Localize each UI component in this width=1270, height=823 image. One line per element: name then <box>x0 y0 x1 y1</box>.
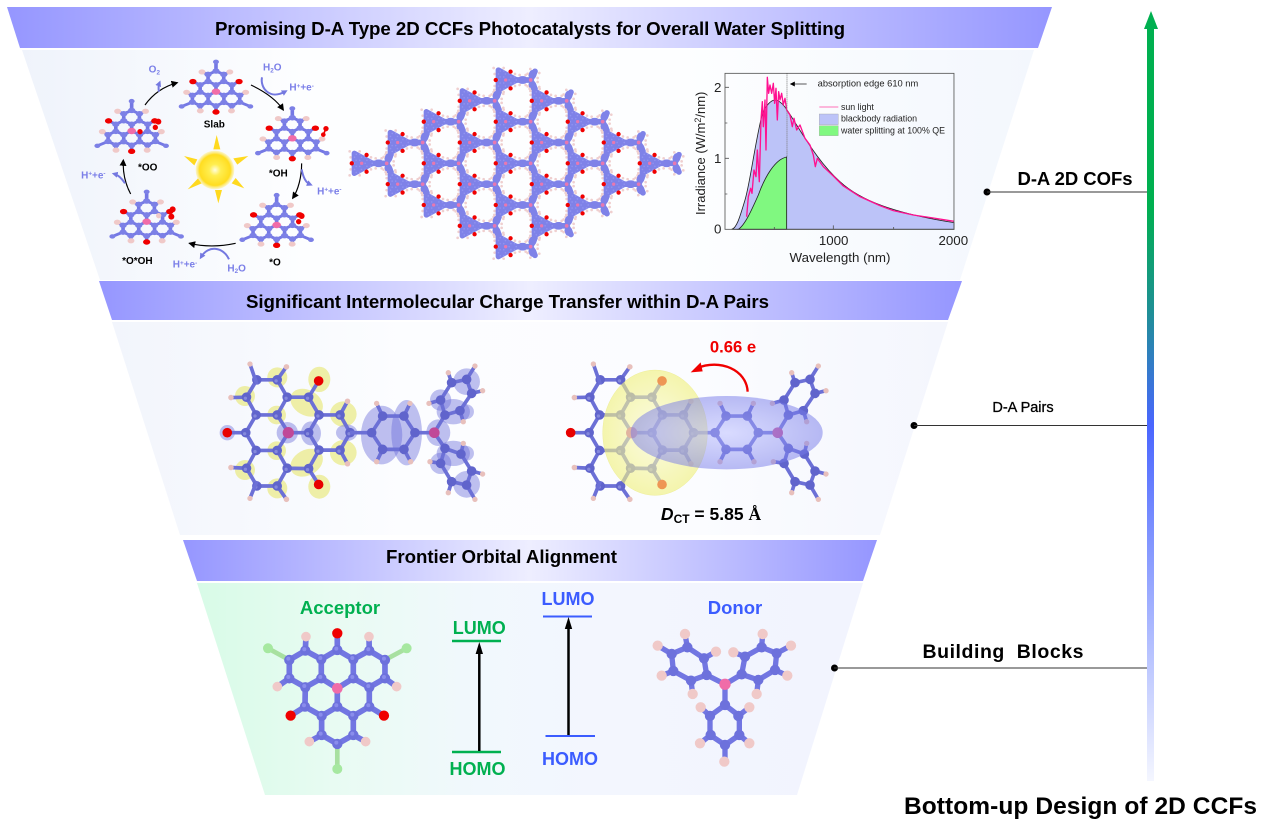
callout: D-A Pairs <box>910 400 1147 429</box>
cycle labels: *O*OH <box>122 256 153 267</box>
callout: D-A 2D COFs <box>984 168 1147 196</box>
heading band: charge transfer: Significant Intermolecular Charge Transfer within D-A Pairs <box>246 291 769 312</box>
axis labels: 1 <box>714 151 721 166</box>
acceptor charge ellipsoid <box>603 370 707 495</box>
cycle labels: 2 <box>235 268 239 275</box>
heading band: charge transfer <box>99 281 962 320</box>
donor energy levels: HOMO <box>542 749 598 769</box>
axis labels: 0 <box>714 221 721 236</box>
cycle labels: 2 <box>156 69 160 76</box>
chart legend: blackbody radiation <box>841 114 917 124</box>
molecule: donor <box>658 634 791 762</box>
blackbody area <box>732 100 954 229</box>
DCT label: CT <box>674 512 690 526</box>
cycle labels: - <box>339 187 342 194</box>
charge transfer arrow and value: 0.66 e <box>710 338 756 357</box>
cycle labels: 2 <box>270 67 274 74</box>
cycle labels: Slab <box>204 120 225 131</box>
cycle labels: +e <box>328 186 340 197</box>
cycle labels: *O <box>269 257 281 268</box>
heading band: frontier orbital alignment <box>183 540 877 581</box>
cycle arrows <box>123 83 302 246</box>
acceptor energy levels <box>450 618 506 779</box>
cycle labels: +e <box>300 83 312 94</box>
chart legend: sun light <box>841 102 874 112</box>
cycle labels: + <box>324 187 328 194</box>
cycle labels: - <box>312 83 314 90</box>
cycle labels: + <box>88 171 92 178</box>
cycle labels: O <box>274 63 282 74</box>
reactant arrows <box>115 77 310 259</box>
COF framework structure <box>350 68 683 259</box>
orbital isosurface molecule <box>220 364 483 499</box>
cycle labels: H <box>289 83 297 94</box>
absorption edge marker <box>787 73 918 157</box>
irradiance chart <box>693 73 968 265</box>
donor charge ellipsoid <box>631 396 823 469</box>
cycle labels <box>81 63 342 275</box>
icon: sun <box>184 135 248 203</box>
molecule: Slab <box>182 62 250 112</box>
cycle labels: *OH <box>269 168 288 179</box>
axis labels: Wavelength (nm) <box>789 250 890 265</box>
chart legend <box>819 102 945 136</box>
charge transfer arrow and value <box>691 338 756 392</box>
cycle labels: +e <box>184 260 196 271</box>
chart legend: water splitting at 100% QE <box>840 126 945 136</box>
cycle labels: H <box>317 186 324 197</box>
cycle labels: H <box>173 260 180 271</box>
axis labels: 2 <box>693 118 703 123</box>
panel: D-A pairs background <box>112 322 948 535</box>
callout: D-A 2D COFs: D-A 2D COFs <box>1018 168 1132 189</box>
axis labels <box>693 80 968 265</box>
cycle labels: O <box>149 65 156 76</box>
axis labels: Irradiance (W/m <box>693 123 708 215</box>
heading band: frontier orbital alignment: Frontier Orbital Alignment <box>386 546 617 567</box>
heading band: overall water splitting: Promising D-A Type 2D CCFs Photocatalysts for Overall Water Splitting <box>215 18 845 39</box>
absorption edge marker: absorption edge 610 nm <box>818 79 918 89</box>
water splitting area <box>738 157 787 229</box>
callout: D-A Pairs: D-A Pairs <box>992 400 1054 416</box>
acceptor isosurfaces <box>235 367 357 499</box>
charge transfer molecule <box>571 364 826 499</box>
DCT label: Å <box>748 504 761 524</box>
panel: D-A 2D COFs background <box>22 50 1034 280</box>
molecule: *O*OH <box>112 192 181 242</box>
cycle labels: *OO <box>138 163 158 174</box>
cycle labels: H <box>263 63 270 74</box>
axis labels: /nm) <box>693 92 708 118</box>
molecule: *OO <box>97 101 166 151</box>
heading band: overall water splitting <box>7 7 1052 48</box>
molecule: *O <box>242 195 311 245</box>
cycle labels: H <box>227 263 235 274</box>
plot frame and ticks <box>725 73 954 229</box>
cycle labels: - <box>103 171 106 178</box>
bottom-up arrow <box>1144 11 1158 781</box>
axis labels: 2 <box>714 80 721 95</box>
molecule: *OH <box>258 108 329 159</box>
Donor label: Donor <box>708 597 762 618</box>
callout: Building Blocks: Building Blocks <box>922 641 1084 663</box>
callout: Building Blocks <box>831 641 1147 672</box>
cycle labels: O <box>238 263 246 274</box>
DCT label: D <box>661 504 674 524</box>
axis labels: 1000 <box>819 233 848 248</box>
donor isosurfaces <box>220 368 480 498</box>
cycle labels: +e <box>92 170 104 181</box>
axis labels: 2000 <box>938 233 968 248</box>
acceptor energy levels: LUMO <box>453 618 506 638</box>
cycle labels: - <box>195 260 197 267</box>
water splitting catalytic cycle <box>81 62 342 275</box>
cycle labels: + <box>180 260 184 267</box>
acceptor energy levels: HOMO <box>450 759 506 779</box>
cycle labels: H <box>81 170 88 181</box>
DCT label: = 5.85 <box>690 504 748 524</box>
bottom title: Bottom-up Design of 2D CCFs <box>904 793 1257 820</box>
sun light curve <box>747 77 954 221</box>
cycle labels: + <box>297 83 301 90</box>
molecule: acceptor <box>268 633 407 769</box>
panel: building blocks background <box>197 583 863 795</box>
donor energy levels <box>542 589 598 769</box>
donor energy levels: LUMO <box>542 589 594 609</box>
Acceptor label: Acceptor <box>300 597 380 618</box>
